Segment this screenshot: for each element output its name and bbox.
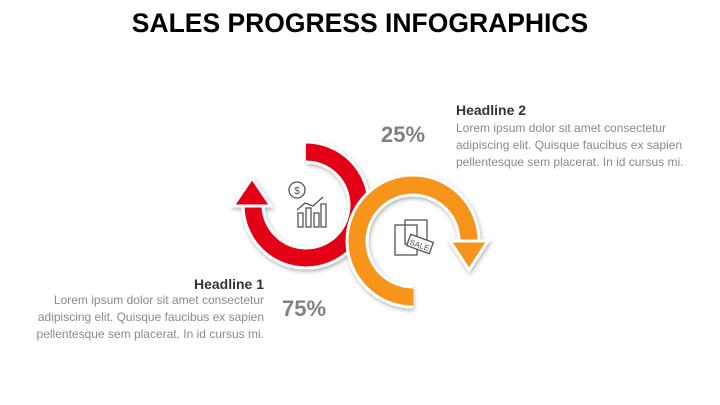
title: SALES PROGRESS INFOGRAPHICS bbox=[132, 8, 588, 38]
text block: headline 2: Headline 2 bbox=[456, 102, 526, 118]
icon: building sale: SALE bbox=[408, 238, 431, 253]
orange arc arrow bbox=[357, 185, 488, 297]
icon: bulb and chart: $ bbox=[294, 186, 300, 197]
red arc arrow bbox=[233, 152, 359, 258]
percentage 25: 25% bbox=[381, 122, 425, 147]
text block: headline 2: Lorem ipsum dolor sit amet consectetur adipiscing elit. Quisque faucibus ex sapien pellentesque sem placerat. In id cursus mi. bbox=[456, 121, 683, 169]
percentage 75: 75% bbox=[282, 296, 326, 321]
text block: headline 1: Headline 1 bbox=[194, 276, 264, 292]
icon: bulb and chart bbox=[289, 182, 326, 227]
text block: headline 1: Lorem ipsum dolor sit amet consectetur adipiscing elit. Quisque faucibus ex sapien pellentesque sem placerat. In id cursus mi. bbox=[37, 293, 264, 341]
icon: building sale bbox=[395, 220, 433, 255]
